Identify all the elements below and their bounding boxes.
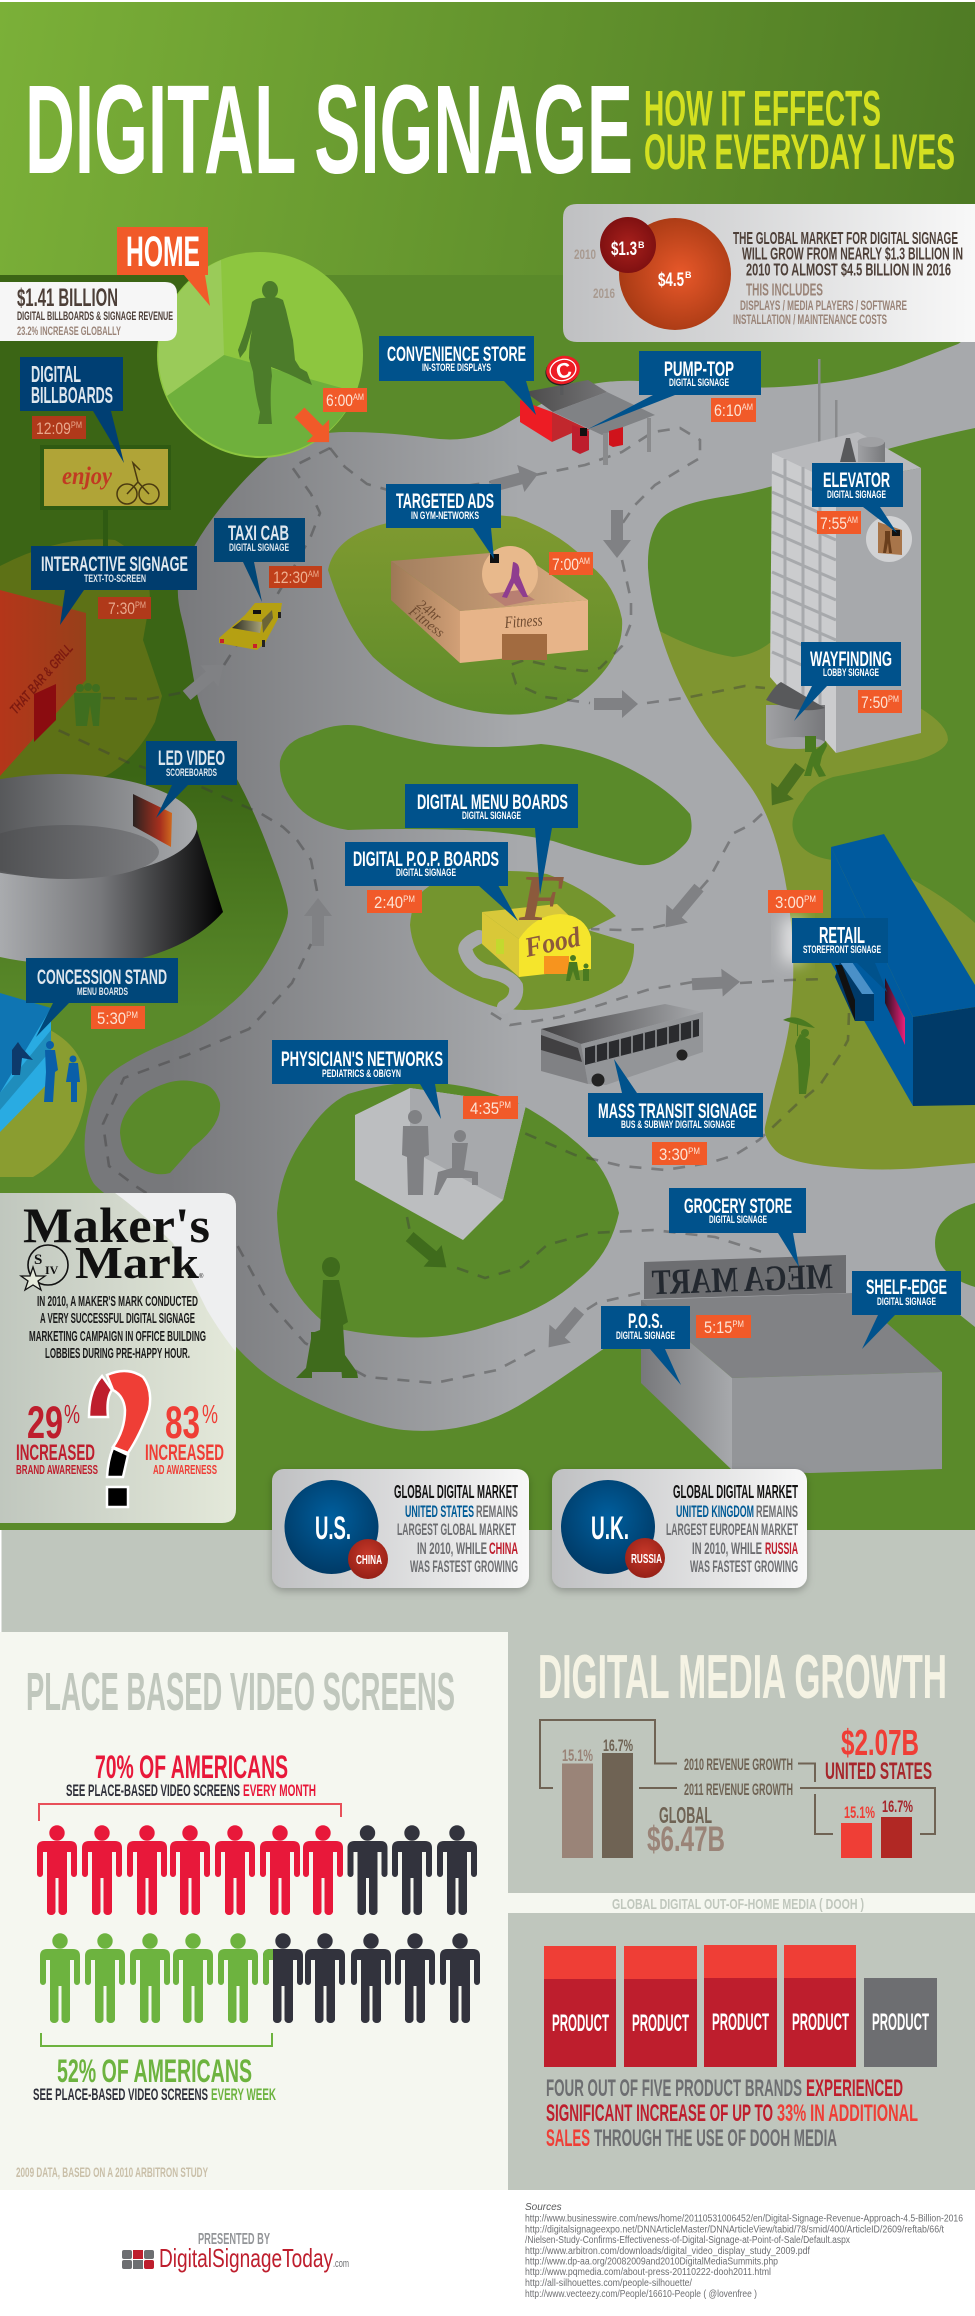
- green islands: [120, 514, 692, 1337]
- callout: digital menu boards: [405, 784, 578, 895]
- time: 3:30 PM: 3:30: [659, 1145, 692, 1164]
- logo seal: [21, 1245, 68, 1290]
- time: 3:00 PM: 3:00: [775, 893, 808, 912]
- callout: targeted ads: [386, 484, 501, 559]
- time: 12:30 AM: [269, 566, 322, 588]
- panel: US market: IN 2010, WHILE: [417, 1539, 487, 1558]
- panel: UK market: [552, 1469, 807, 1588]
- building: office tower: [766, 359, 921, 753]
- stat: 29%: 29: [27, 1397, 63, 1448]
- panel: US market: [272, 1469, 529, 1588]
- callout: digital billboards: [20, 357, 124, 463]
- lobby cylinder: [766, 682, 825, 749]
- callout: physician's networks: PEDIATRICS & OB/GYN: [322, 1068, 401, 1080]
- footer: sources: Sources: [525, 2202, 562, 2213]
- icon: C sign: C: [554, 358, 574, 384]
- panel: US market: CHINA: [356, 1552, 382, 1567]
- subtitle: [644, 80, 955, 180]
- callout: convenience store: CONVENIENCE STORE: [387, 343, 526, 366]
- time: 7:50 PM: PM: [888, 694, 899, 704]
- chart: product brands: PRODUCT: [632, 2010, 689, 2037]
- callout: physician's networks: [272, 1040, 448, 1119]
- time: 12:09 PM: [32, 416, 86, 439]
- band: DOOH heading: GLOBAL DIGITAL OUT-OF-HOME MEDIA ( DOOH ): [612, 1896, 864, 1913]
- time: 12:09 PM: 12:09: [36, 419, 79, 438]
- panel: UK market: LARGEST EUROPEAN MARKET: [666, 1520, 798, 1539]
- global bars: [562, 1736, 725, 1859]
- time: 12:09 PM: PM: [71, 420, 82, 430]
- panel: global market forecast: B: [685, 270, 692, 280]
- time: 4:35 PM: PM: [499, 1100, 511, 1110]
- bubble: 2016 market: [619, 218, 731, 330]
- panel: global market forecast: [563, 204, 975, 342]
- time: 7:30 PM: 7:30: [108, 599, 141, 618]
- time: 4:35 PM: [463, 1096, 518, 1119]
- panel: global market forecast: B: [638, 240, 645, 250]
- time: 4:35 PM: 4:35: [470, 1099, 503, 1118]
- callout: convenience store: IN-STORE DISPLAYS: [422, 362, 491, 374]
- callout: interactive signage: INTERACTIVE SIGNAGE: [41, 553, 188, 576]
- panel: UK market: GLOBAL DIGITAL MARKET: [673, 1482, 798, 1502]
- panel: US market: U.S.: [315, 1510, 351, 1546]
- panel: UK market: IN 2010, WHILE: [692, 1539, 762, 1558]
- callout: digital pop boards: DIGITAL P.O.P. BOARDS: [353, 848, 499, 871]
- time: 7:30 PM: PM: [135, 600, 146, 610]
- time: 6:10 AM: 6:10: [714, 401, 747, 420]
- footnote: 2009 DATA, BASED ON A 2010 ARBITRON STUDY: [16, 2164, 208, 2180]
- time: 5:15 PM: 5:15: [704, 1318, 737, 1337]
- time: 5:30 PM: 5:30: [97, 1009, 130, 1028]
- stat: 29%: [16, 1397, 98, 1477]
- footer: presented by: [122, 2231, 349, 2273]
- silhouette: woman with umbrella: [783, 1017, 815, 1094]
- stat: 70 percent: [39, 1749, 341, 1821]
- callout: POS: [601, 1306, 690, 1385]
- time: 7:55 AM: [817, 511, 861, 534]
- panel: US market: CHINA: [489, 1539, 518, 1558]
- legend labels: 2010 REVENUE GROWTH: [684, 1755, 793, 1774]
- callout: digital pop boards: DIGITAL SIGNAGE: [396, 867, 456, 879]
- panel: maker's mark case study: ®: [199, 1273, 204, 1280]
- panel: maker's mark case study: Mark: [75, 1237, 199, 1288]
- building: convenience store: [520, 352, 655, 465]
- stat: 52 percent: 52% OF AMERICANS: [57, 2053, 252, 2089]
- time: 7:30 PM: [98, 597, 151, 619]
- header band: [0, 2, 975, 276]
- footer: sources: http://www.vecteezy.com/People/16610-People ( @lovenfree ): [525, 2289, 757, 2300]
- panel: US market: UNITED STATES: [405, 1502, 474, 1521]
- callout: LED video: LED VIDEO: [158, 747, 225, 770]
- callout: digital billboards: BILLBOARDS: [31, 382, 113, 408]
- footer: presented by: DigitalSignageToday: [159, 2243, 333, 2273]
- time: 5:30 PM: PM: [126, 1010, 138, 1020]
- text block: product finding: SIGNIFICANT INCREASE OF UP TO: [546, 2100, 773, 2127]
- panel: global market forecast: $4.5: [658, 270, 684, 291]
- silhouettes: queue: [12, 1041, 80, 1102]
- stat: 83%: INCREASED: [145, 1440, 224, 1465]
- left edge strip: [0, 1530, 2, 1632]
- global bars: 16.7%: [603, 1736, 633, 1755]
- building: mega mart: MEGA MART: [651, 1256, 833, 1302]
- callout: targeted ads: IN GYM-NETWORKS: [411, 510, 479, 522]
- building: fitness: [391, 546, 588, 663]
- global bars: 15.1%: [562, 1746, 593, 1765]
- time: 6:00 AM: [323, 388, 367, 412]
- panel: global market forecast: 2010: [574, 246, 596, 262]
- time: 12:30 AM: AM: [308, 569, 319, 579]
- building: food stand: [482, 862, 591, 977]
- panel: maker's mark case study: [0, 1193, 236, 1523]
- text block: product finding: [546, 2075, 918, 2152]
- footer: sources: http://www.dp-aa.org/20082009and2010DigitalMediaSummits.php: [525, 2256, 778, 2267]
- building: fitness: 24hr: [414, 597, 444, 626]
- elevator cutaway: [866, 516, 912, 562]
- time: 7:50 PM: 7:50: [861, 693, 894, 712]
- route dashes: [58, 428, 849, 1383]
- panel: UK market: RUSSIA: [765, 1539, 798, 1558]
- time: 3:30 PM: PM: [688, 1146, 700, 1156]
- stat: 52 percent: EVERY WEEK: [211, 2085, 276, 2104]
- time: 7:55 AM: AM: [847, 515, 858, 525]
- callout: concession stand: CONCESSION STAND: [37, 966, 167, 989]
- panel: maker's mark case study: IN 2010, A MAKER'S MARK CONDUCTED: [37, 1293, 198, 1310]
- logo wordmark: Maker's: [23, 1197, 210, 1253]
- building: fitness: Fitness: [503, 610, 543, 632]
- callout: wayfinding: LOBBY SIGNAGE: [823, 667, 879, 679]
- text block: product finding: SALES: [546, 2125, 590, 2152]
- map background: [0, 275, 975, 1530]
- callout: convenience store: [379, 336, 536, 415]
- US bars: 16.7%: [882, 1797, 913, 1816]
- building: fitness: Fitness: [405, 604, 447, 641]
- time: 7:55 AM: 7:55: [820, 514, 853, 533]
- time: 7:00 AM: 7:00: [552, 555, 585, 574]
- time: 2:40 PM: [367, 890, 422, 913]
- logo seal: IV: [45, 1263, 59, 1277]
- callout: targeted ads: TARGETED ADS: [396, 490, 494, 513]
- silhouette: hiker: [804, 736, 827, 777]
- time: 2:40 PM: 2:40: [374, 893, 407, 912]
- panel: UK market: RUSSIA: [631, 1551, 662, 1566]
- callout: pump-top: [588, 351, 761, 429]
- footer: presented by: .com: [333, 2258, 349, 2270]
- chart: revenue growth: [540, 1720, 935, 1859]
- building: taxi: [219, 603, 282, 650]
- callout: LED video: SCOREBOARDS: [166, 767, 217, 779]
- lower background band: [0, 1530, 975, 2190]
- home location circle: [157, 252, 363, 458]
- panel: maker's mark case study: LOBBIES DURING PRE-HAPPY HOUR.: [45, 1345, 190, 1362]
- callout: POS: DIGITAL SIGNAGE: [616, 1330, 675, 1342]
- icon: question mark: [89, 1371, 150, 1507]
- panel: UK market: REMAINS: [756, 1502, 798, 1521]
- callout: elevator: ELEVATOR: [823, 469, 890, 492]
- building: food stand: Food: [521, 922, 584, 964]
- stat: 83%: [145, 1397, 224, 1477]
- callout: LED video: [146, 741, 237, 818]
- callout: interactive signage: TEXT-TO-SCREEN: [84, 573, 146, 585]
- callout: digital pop boards: [345, 842, 518, 921]
- billboard: enjoy: [62, 463, 113, 490]
- callout: physician's networks: PHYSICIAN'S NETWORKS: [281, 1048, 443, 1071]
- panel: revenue: DIGITAL BILLBOARDS & SIGNAGE REVENUE: [17, 309, 173, 323]
- callout: wayfinding: [794, 642, 901, 721]
- silhouette: doctor and patient: [402, 1110, 478, 1195]
- panel: UK market: U.K.: [591, 1510, 629, 1546]
- chart: product brands: [544, 1945, 937, 2067]
- road network: [85, 332, 975, 1431]
- callout: home: HOME: [126, 228, 200, 276]
- panel: US market: WAS FASTEST GROWING: [410, 1557, 518, 1576]
- pictogram: 7 of 10: [37, 1825, 477, 1915]
- callout: grocery store: DIGITAL SIGNAGE: [709, 1214, 767, 1226]
- panel: place based video screens: [0, 1632, 508, 2190]
- callout: concession stand: MENU BOARDS: [77, 986, 128, 998]
- callout: pump-top: PUMP-TOP: [664, 358, 734, 381]
- building: concession stand: [0, 993, 80, 1132]
- pictogram: 5 of 10: [40, 1933, 480, 2023]
- chart: revenue growth: 2011 REVENUE GROWTH: [684, 1780, 793, 1799]
- panel: US market: REMAINS: [476, 1502, 518, 1521]
- US bars: $2.07B: [841, 1722, 919, 1763]
- callout: elevator: [812, 463, 903, 533]
- text block: product finding: EXPERIENCED: [806, 2075, 903, 2102]
- callout: digital billboards: DIGITAL: [31, 361, 81, 387]
- time: 2:40 PM: PM: [403, 894, 415, 904]
- time: 6:00 AM: 6:00: [326, 391, 359, 410]
- panel: global market forecast: $1.3: [611, 239, 637, 260]
- stat: 83%: 83: [165, 1397, 200, 1448]
- stat: 70 percent: EVERY MONTH: [243, 1781, 316, 1800]
- time: 7:00 AM: [549, 552, 593, 575]
- panel: maker's mark case study: MARKETING CAMPAIGN IN OFFICE BUILDING: [29, 1328, 206, 1345]
- callout: POS: P.O.S.: [628, 1310, 663, 1333]
- callout: interactive signage: [31, 546, 197, 625]
- time: 6:10 AM: [711, 398, 756, 422]
- callout: grocery store: GROCERY STORE: [684, 1195, 792, 1218]
- silhouette: woman at home: [238, 281, 312, 424]
- callout: digital menu boards: DIGITAL MENU BOARDS: [417, 791, 568, 814]
- chart: product brands: PRODUCT: [792, 2009, 849, 2036]
- icon: orange arrow from home: [288, 401, 340, 453]
- logo seal: S: [34, 1252, 42, 1268]
- time: 6:00 AM: AM: [353, 392, 364, 402]
- time: 3:00 PM: [768, 890, 823, 913]
- callout: mass transit signage: [588, 1059, 763, 1137]
- time: 7:00 AM: AM: [579, 556, 590, 566]
- time: 3:00 PM: PM: [804, 894, 816, 904]
- callout: pump-top: DIGITAL SIGNAGE: [669, 377, 729, 389]
- footer: presented by: PRESENTED BY: [198, 2231, 270, 2248]
- footer: sources: /Nielsen-Study-Confirms-Effectiveness-of-Digital-Signage-at-Point-of-Sale/Default.aspx: [525, 2235, 850, 2246]
- stat: 70 percent: 70% OF AMERICANS: [95, 1749, 288, 1785]
- callout: retail: STOREFRONT SIGNAGE: [803, 944, 881, 956]
- US bars: 15.1%: [844, 1803, 875, 1822]
- footer: sources: http://all-silhouettes.com/people-silhouette/: [525, 2278, 692, 2289]
- panel: revenue: 23.2% INCREASE GLOBALLY: [17, 324, 121, 338]
- bubble: 2010 market: [600, 217, 656, 273]
- building: bar and grill: [0, 590, 86, 776]
- glow behind retail callout: [782, 918, 804, 963]
- callout: shelf-edge: [852, 1271, 961, 1349]
- heading: PLACE BASED VIDEO SCREENS: [26, 1662, 455, 1722]
- footer: sources: [525, 2202, 963, 2300]
- building: mega mart: [641, 1255, 942, 1473]
- panel: UK market: WAS FASTEST GROWING: [690, 1557, 798, 1576]
- stat: 52 percent: [33, 2033, 276, 2104]
- footer: sources: http://www.arbitron.com/downloads/digital_video_display_study_2009.pdf: [525, 2246, 810, 2257]
- callout: retail: RETAIL: [819, 922, 865, 948]
- time: 3:30 PM: [652, 1142, 707, 1165]
- building: stadium: [0, 774, 223, 965]
- stat: 70 percent: SEE PLACE-BASED VIDEO SCREENS: [66, 1781, 240, 1800]
- panel: revenue: [0, 282, 177, 341]
- silhouette: woman walking with bags: [296, 1257, 358, 1378]
- building: bar and grill: THAT BAR & GRILL: [6, 640, 76, 717]
- callout: taxi cab: [214, 518, 305, 602]
- callout: mass transit signage: BUS & SUBWAY DIGITAL SIGNAGE: [621, 1119, 735, 1131]
- chart: product brands: PRODUCT: [552, 2010, 609, 2037]
- callout: elevator: DIGITAL SIGNAGE: [827, 489, 886, 501]
- panel: US market: LARGEST GLOBAL MARKET: [397, 1520, 516, 1539]
- stat: 29%: BRAND AWARENESS: [16, 1462, 98, 1477]
- time: 6:10 AM: AM: [742, 402, 753, 412]
- global bars: GLOBAL: [659, 1802, 712, 1828]
- time: 5:15 PM: [696, 1315, 751, 1338]
- footer: sources: http://www.pqmedia.com/about-press-20110222-dooh2011.html: [525, 2267, 771, 2278]
- panel: revenue: $1.41 BILLION: [17, 284, 118, 312]
- building: physician room: [355, 1088, 526, 1240]
- building: retail: [831, 834, 975, 1106]
- LED screen: [133, 794, 172, 847]
- chart: product brands: PRODUCT: [712, 2009, 769, 2036]
- icon: logo grid: [122, 2250, 154, 2269]
- callout: wayfinding: WAYFINDING: [810, 648, 892, 671]
- building: food stand: F: [518, 862, 565, 935]
- time: 12:30 AM: 12:30: [273, 568, 316, 587]
- callout: digital menu boards: DIGITAL SIGNAGE: [462, 810, 521, 822]
- panel: global market forecast: THIS INCLUDES: [746, 280, 823, 300]
- route arrows: [178, 460, 811, 1356]
- building: bus: [541, 1004, 703, 1086]
- callout: grocery store: [669, 1188, 806, 1267]
- silhouette: group at bar: [74, 683, 101, 726]
- callout: shelf-edge: DIGITAL SIGNAGE: [877, 1296, 936, 1308]
- callout: retail: [792, 918, 888, 992]
- stat: 29%: INCREASED: [16, 1440, 95, 1465]
- time: 5:30 PM: [91, 1006, 145, 1029]
- panel: UK market: UNITED KINGDOM: [676, 1502, 754, 1521]
- callout: concession stand: [26, 958, 178, 1037]
- stat: 83%: %: [202, 1399, 218, 1429]
- callout: home: [117, 227, 210, 306]
- band: DOOH heading: [508, 1893, 975, 1913]
- time: 7:50 PM: [858, 690, 902, 713]
- global bars: $6.47B: [647, 1820, 725, 1859]
- stat: 83%: AD AWARENESS: [153, 1462, 217, 1477]
- billboard: [40, 445, 171, 548]
- time: 5:15 PM: PM: [732, 1319, 744, 1329]
- panel: global market forecast: 2016: [593, 285, 615, 301]
- callout: taxi cab: TAXI CAB: [228, 522, 289, 545]
- stat: 52 percent: SEE PLACE-BASED VIDEO SCREENS: [33, 2085, 208, 2104]
- silhouette: parent and child: [566, 955, 589, 981]
- callout: taxi cab: DIGITAL SIGNAGE: [229, 542, 289, 554]
- panel: US market: GLOBAL DIGITAL MARKET: [394, 1482, 518, 1502]
- panel: maker's mark case study: A VERY SUCCESSFUL DIGITAL SIGNAGE: [40, 1310, 195, 1327]
- US bars: [825, 1722, 932, 1858]
- callout: mass transit signage: MASS TRANSIT SIGNAGE: [598, 1100, 757, 1123]
- stat: 29%: %: [64, 1399, 80, 1429]
